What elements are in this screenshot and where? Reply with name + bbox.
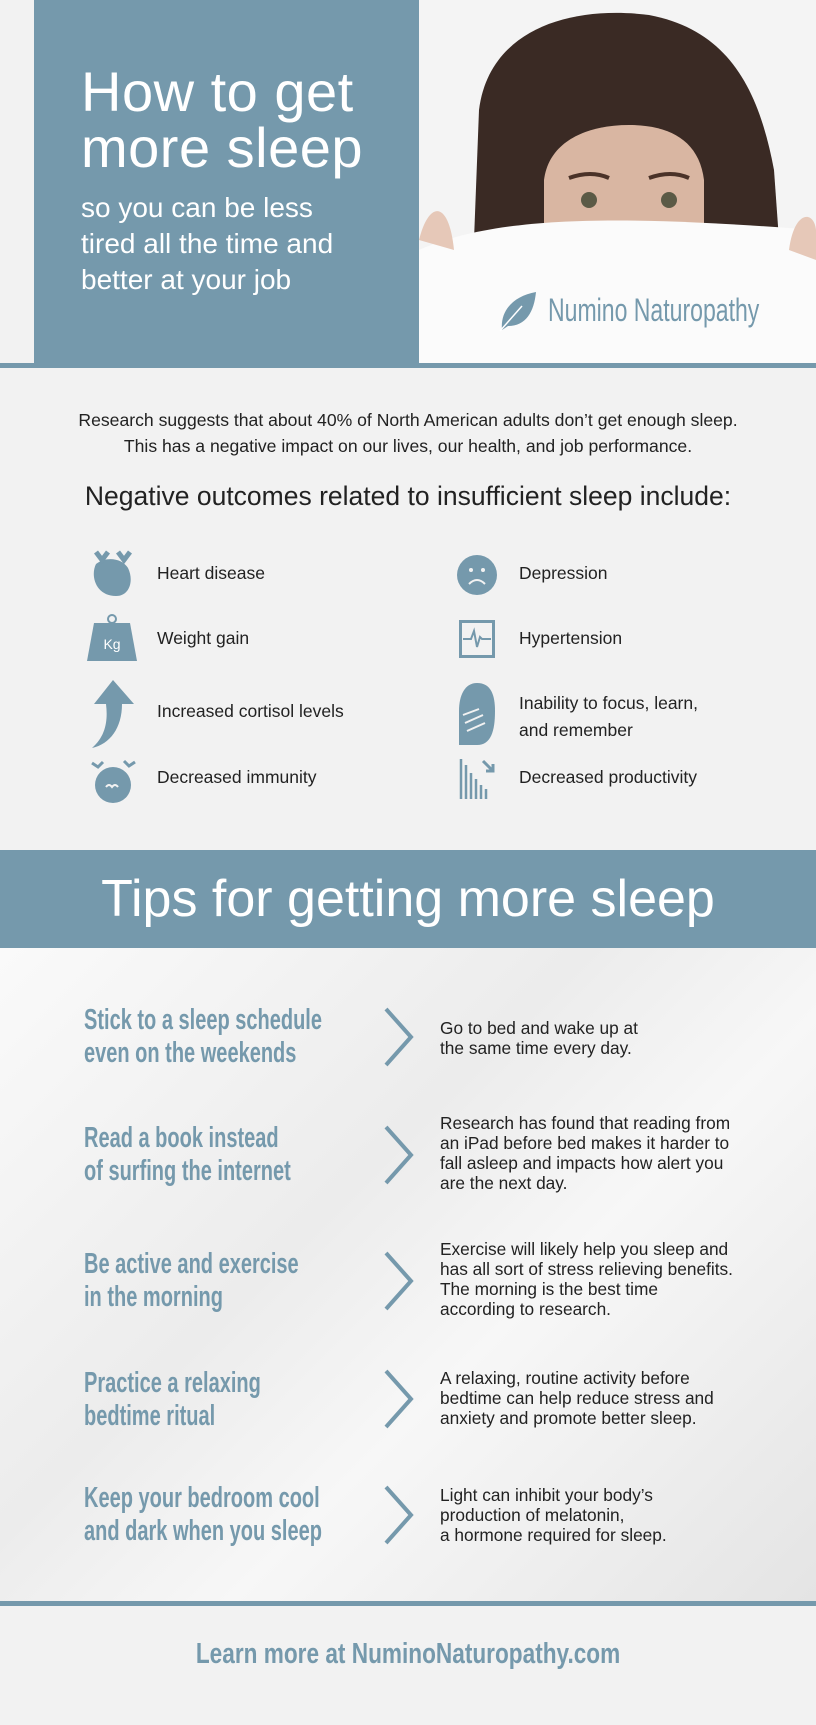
subtitle: better at your job	[81, 264, 291, 295]
title: more sleep	[81, 116, 363, 179]
tip 3: The morning is the best time	[440, 1279, 658, 1299]
icon: chevron	[384, 1008, 414, 1066]
icon: monitor pulse	[459, 620, 495, 658]
tip 4: bedtime can help reduce stress and	[440, 1388, 714, 1408]
tip 2: of surfing the internet	[84, 1155, 291, 1187]
text: inability to focus	[519, 693, 698, 740]
icon: hand over face	[459, 683, 495, 745]
subtitle	[81, 192, 333, 295]
tip 5: a hormone required for sleep.	[440, 1525, 667, 1545]
text: cortisol: Increased cortisol levels	[157, 701, 344, 721]
intro text	[78, 410, 738, 456]
footer link text: Learn more at NuminoNaturopathy.com	[196, 1638, 620, 1670]
title: How to get	[81, 60, 354, 123]
header underline	[0, 363, 816, 368]
tip 3	[84, 1239, 733, 1319]
tip 1: Stick to a sleep schedule	[84, 1004, 322, 1036]
icon: chevron	[384, 1486, 414, 1544]
tip 4: A relaxing, routine activity before	[440, 1368, 690, 1388]
icon: weight: Kg	[103, 636, 121, 652]
header photo: woman under blanket	[419, 0, 816, 363]
tip 5: production of melatonin,	[440, 1505, 624, 1525]
text: inability to focus: Inability to focus, learn,	[519, 693, 698, 713]
text: hypertension: Hypertension	[519, 628, 622, 648]
text: inability to focus: and remember	[519, 720, 633, 740]
tip 2: fall asleep and impacts how alert you	[440, 1153, 723, 1173]
tip 1: even on the weekends	[84, 1037, 296, 1069]
icon: chevron	[384, 1252, 414, 1310]
intro text: This has a negative impact on our lives, our health, and job performance.	[124, 436, 692, 456]
icon: head with birds	[91, 760, 136, 803]
brand name: Numino Naturopathy	[548, 292, 759, 328]
text: productivity: Decreased productivity	[519, 767, 697, 787]
subtitle: tired all the time and	[81, 228, 333, 259]
subtitle: so you can be less	[81, 192, 313, 223]
tip 3: Be active and exercise	[84, 1248, 299, 1280]
logo	[502, 292, 760, 330]
icon: chevron	[384, 1126, 414, 1184]
icon: arrow up	[92, 680, 134, 748]
banner: tips heading	[0, 850, 816, 948]
tip 5: Light can inhibit your body’s	[440, 1485, 653, 1505]
tip 2: Research has found that reading from	[440, 1113, 730, 1133]
icon: heart	[94, 550, 132, 596]
tip 4: bedtime ritual	[84, 1400, 215, 1432]
text: immunity: Decreased immunity	[157, 767, 316, 787]
icon: weight	[87, 614, 137, 661]
tip 3: in the morning	[84, 1281, 223, 1313]
intro text: Research suggests that about 40% of North American adults don’t get enough sleep.	[78, 410, 738, 430]
outcomes list	[87, 550, 698, 803]
header panel: blue title block	[34, 0, 419, 363]
icon: chevron	[384, 1370, 414, 1428]
tip 1: Go to bed and wake up at	[440, 1018, 638, 1038]
tip 1: the same time every day.	[440, 1038, 632, 1058]
footer line	[0, 1601, 816, 1606]
text: weight gain: Weight gain	[157, 628, 249, 648]
heading: negative outcomes: Negative outcomes related to insufficient sleep include:	[85, 481, 731, 511]
tip 1	[84, 1004, 638, 1069]
tip 3: according to research.	[440, 1299, 611, 1319]
tip 5	[84, 1482, 667, 1547]
text: heart disease: Heart disease	[157, 563, 265, 583]
tip 2: Read a book instead	[84, 1122, 279, 1154]
banner: tips heading: Tips for getting more sleep	[101, 870, 715, 928]
tip 5: and dark when you sleep	[84, 1515, 322, 1547]
icon: sad face	[457, 555, 497, 595]
tips panel	[0, 948, 816, 1603]
tip 4	[84, 1367, 714, 1432]
tip 2	[84, 1113, 730, 1193]
icon: leaf	[502, 292, 536, 330]
tip 3: has all sort of stress relieving benefits.	[440, 1259, 733, 1279]
tip 2: an iPad before bed makes it harder to	[440, 1133, 729, 1153]
tip 5: Keep your bedroom cool	[84, 1482, 320, 1514]
tip 4: Practice a relaxing	[84, 1367, 261, 1399]
title	[81, 60, 363, 179]
text: depression: Depression	[519, 563, 608, 583]
tip 4: anxiety and promote better sleep.	[440, 1408, 696, 1428]
icon: declining bars	[460, 759, 494, 799]
tip 2: are the next day.	[440, 1173, 567, 1193]
tip 3: Exercise will likely help you sleep and	[440, 1239, 728, 1259]
